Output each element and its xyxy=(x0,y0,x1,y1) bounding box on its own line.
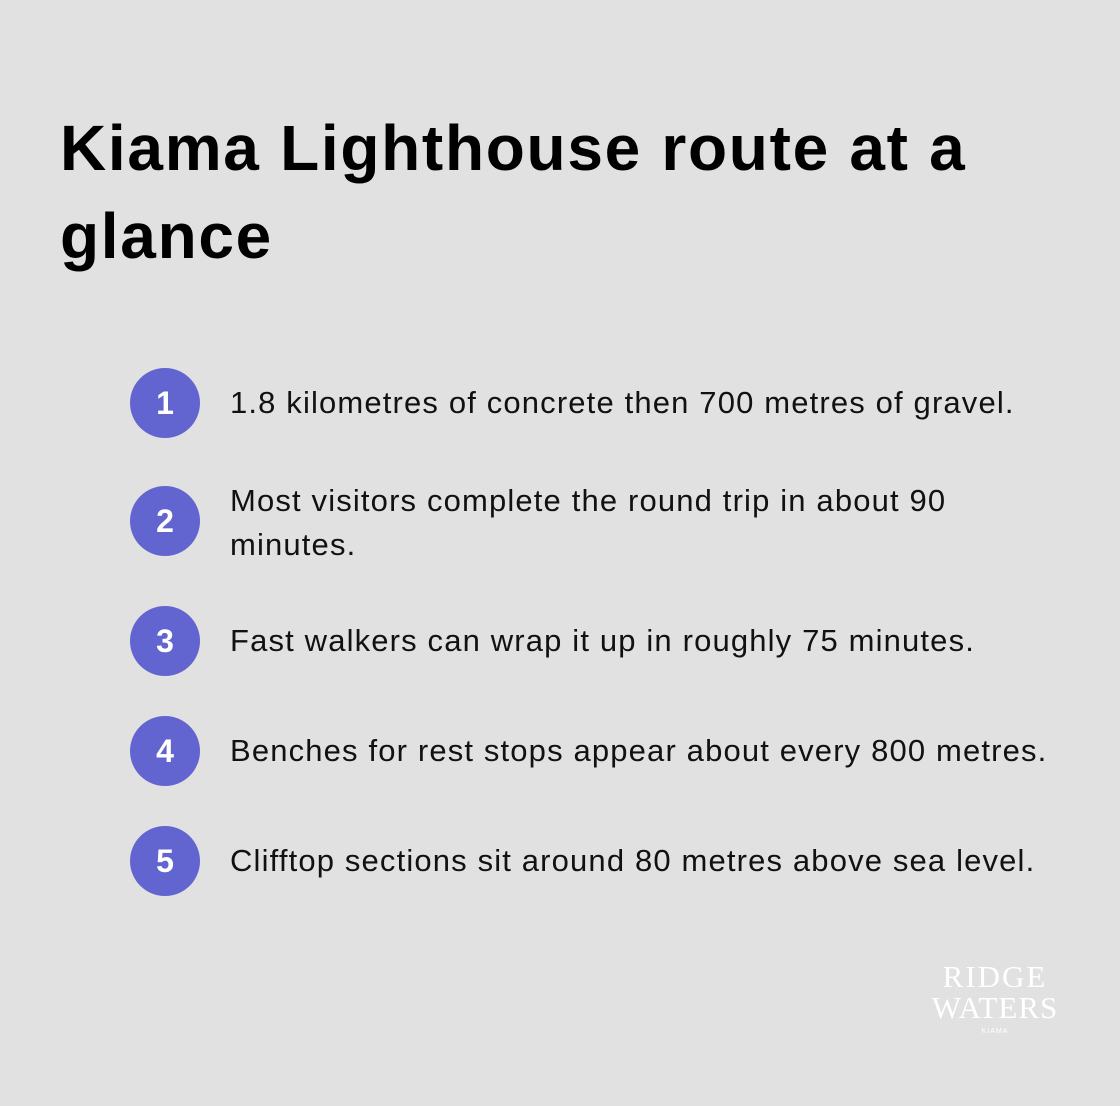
badge 4 xyxy=(130,716,200,786)
badge 2: 2 xyxy=(156,503,174,539)
badge 1 xyxy=(130,368,200,438)
badge 2 xyxy=(130,486,200,556)
text 3: Fast walkers can wrap it up in roughly 75 minutes. xyxy=(230,623,975,658)
text 2: Most visitors complete the round trip in about 90 minutes. xyxy=(230,483,946,562)
item 4 xyxy=(130,716,1047,786)
badge 5: 5 xyxy=(156,843,174,879)
item 5 xyxy=(130,826,1035,896)
logo xyxy=(932,959,1058,1035)
logo: RIDGE xyxy=(943,959,1047,994)
logo: KIAMA xyxy=(982,1028,1008,1035)
logo: WATERS xyxy=(932,990,1058,1025)
item 2 xyxy=(130,483,946,562)
badge 1: 1 xyxy=(156,385,174,421)
title: Kiama Lighthouse route at a glance xyxy=(60,112,966,272)
badge 5 xyxy=(130,826,200,896)
item 3 xyxy=(130,606,975,676)
text 4: Benches for rest stops appear about every 800 metres. xyxy=(230,733,1047,768)
text 1: 1.8 kilometres of concrete then 700 metres of gravel. xyxy=(230,385,1015,420)
badge 3: 3 xyxy=(156,623,174,659)
item 1 xyxy=(130,368,1015,438)
text 5: Clifftop sections sit around 80 metres above sea level. xyxy=(230,843,1035,878)
badge 3 xyxy=(130,606,200,676)
badge 4: 4 xyxy=(156,733,174,769)
